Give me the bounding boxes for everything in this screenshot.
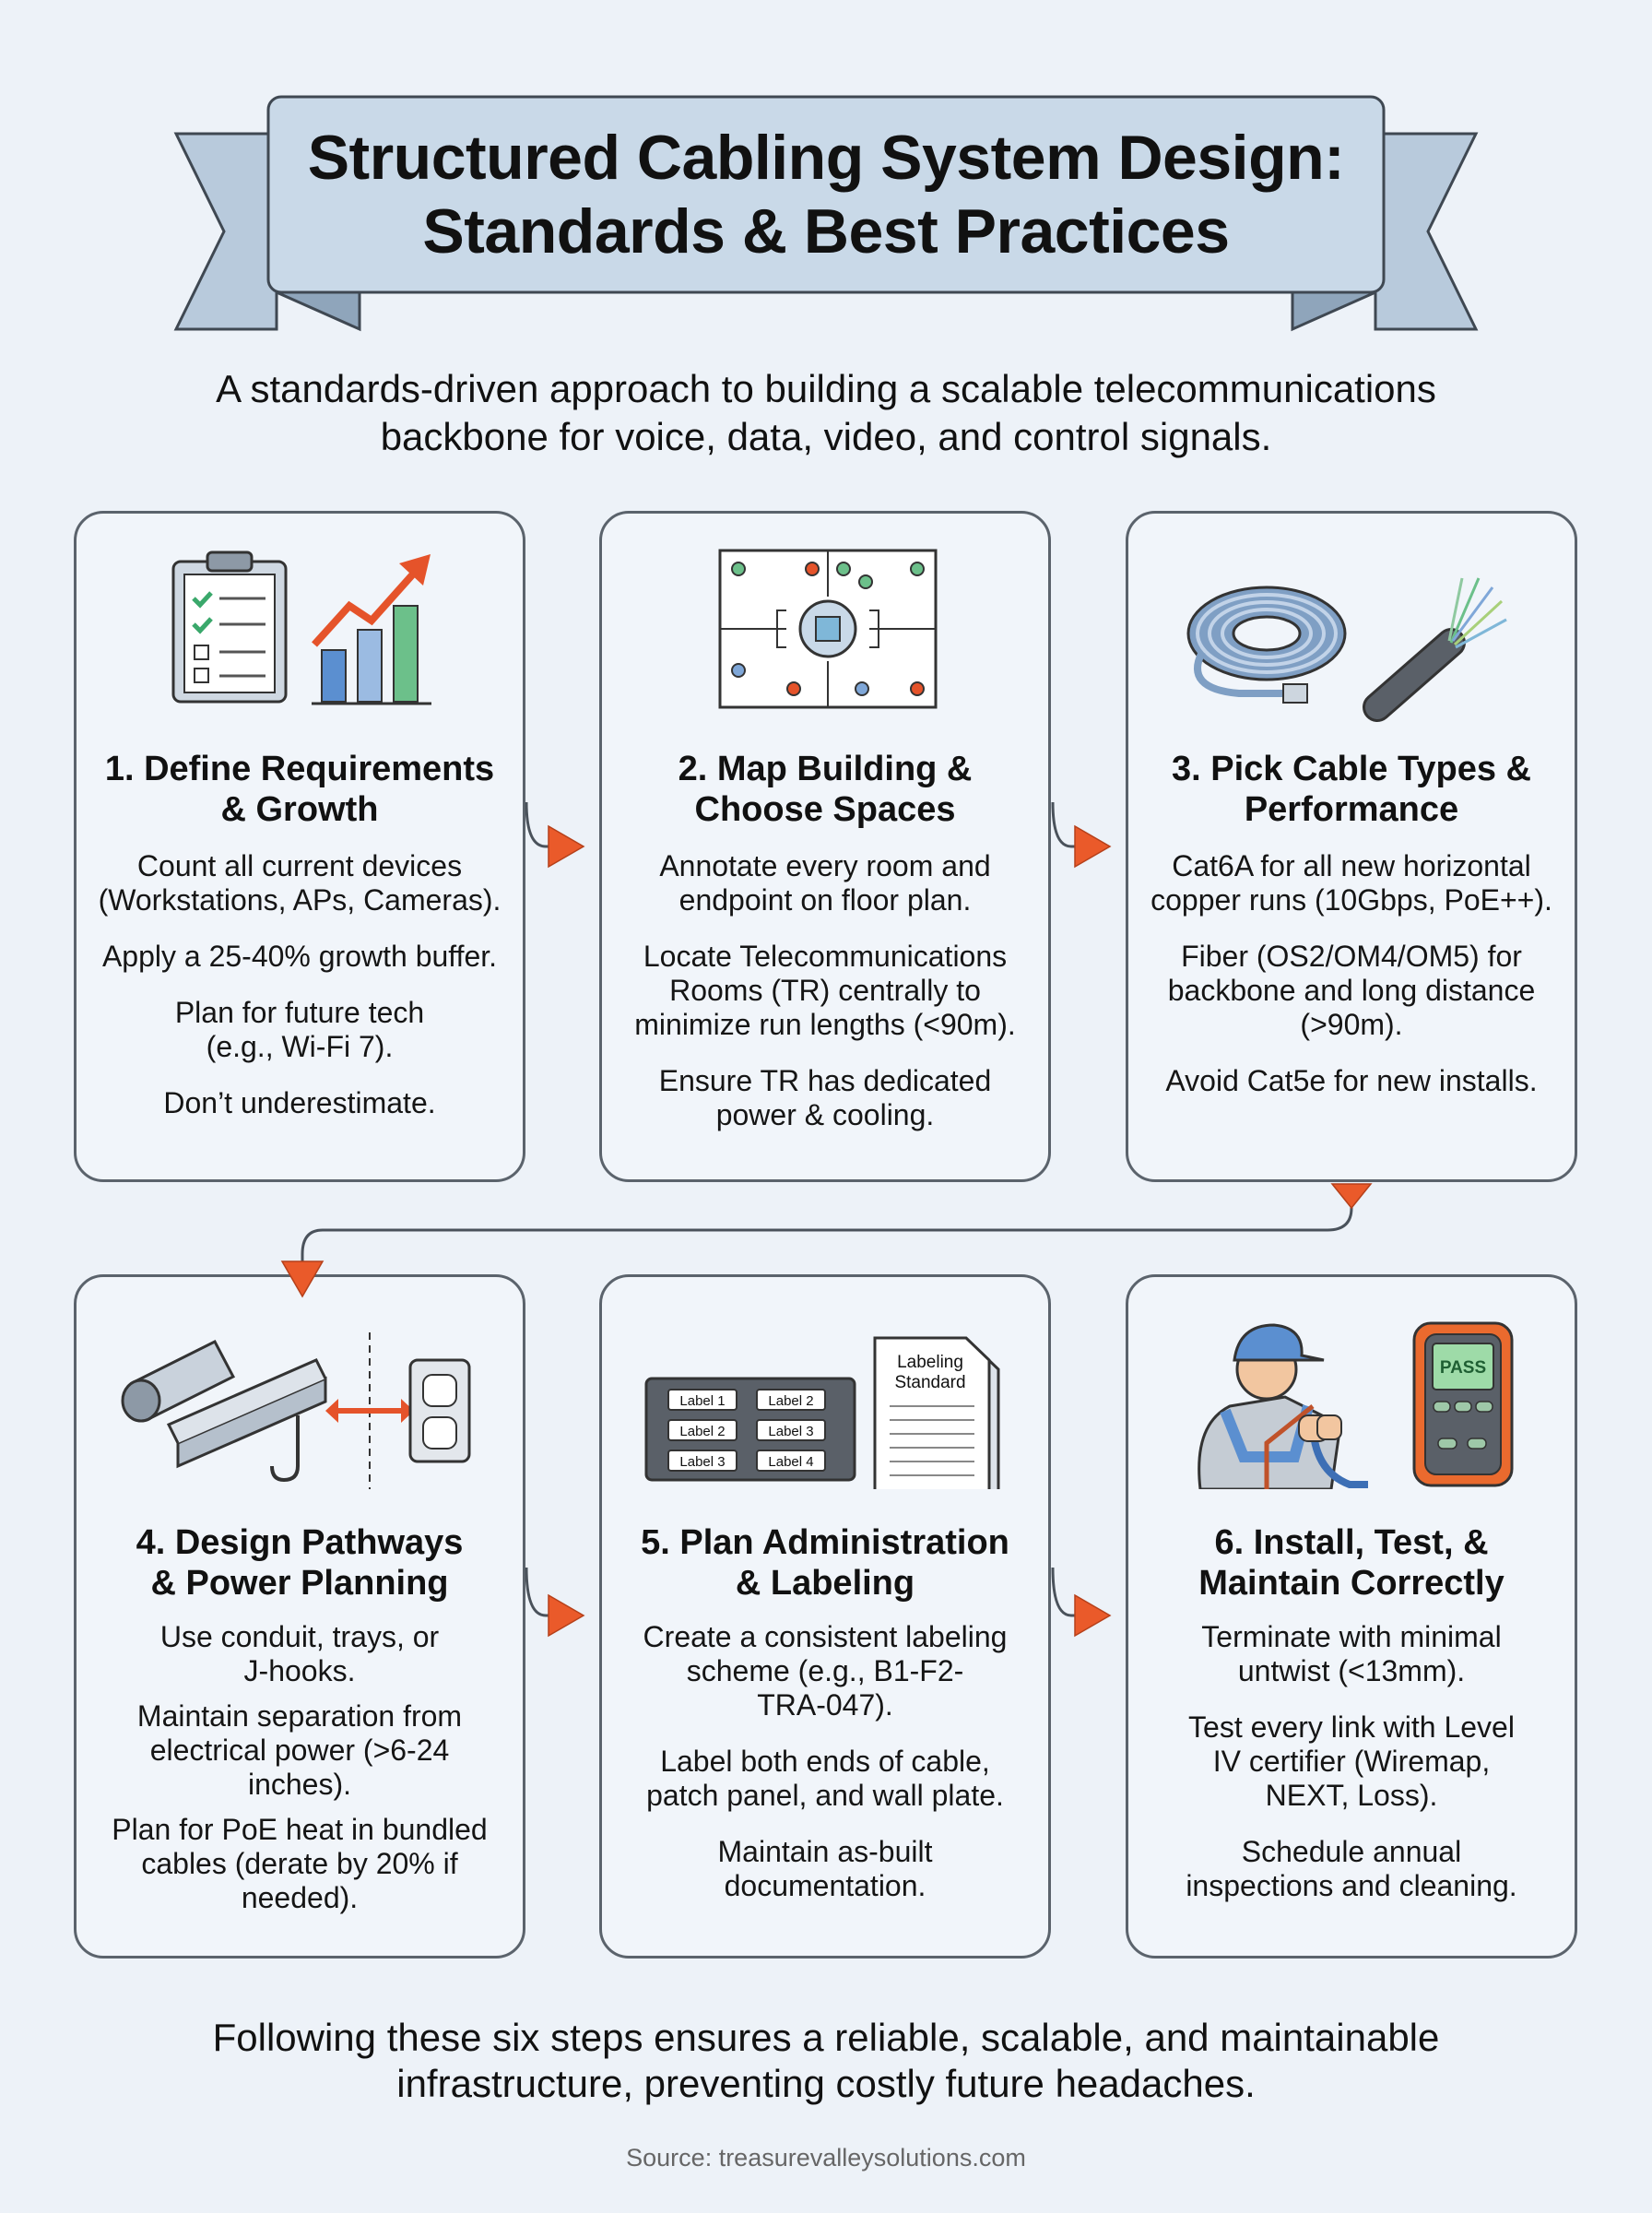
body 3: (>90m). [1300, 1008, 1403, 1041]
icon: patch panel and document: Label 1 [679, 1393, 726, 1409]
subtitle [216, 367, 1436, 458]
body 1: Apply a 25-40% growth buffer. [102, 940, 497, 973]
panel: 6 install test [1126, 1274, 1577, 1959]
icon: clipboard and growth chart [171, 551, 431, 704]
body 2: Rooms (TR) centrally to [669, 974, 981, 1007]
body 2: Locate Telecommunications [643, 940, 1007, 973]
body 4: inches). [248, 1768, 351, 1801]
body 5: documentation. [725, 1869, 926, 1902]
heading 2: Choose Spaces [695, 790, 955, 829]
body 5: Create a consistent labeling [643, 1620, 1007, 1653]
body 5: Label both ends of cable, [660, 1745, 990, 1778]
heading 1: 1. Define Requirements [105, 750, 494, 788]
heading 1 [105, 750, 494, 829]
body 6: untwist (<13mm). [1238, 1654, 1465, 1687]
icon: patch panel and document: Label 2 [679, 1424, 726, 1439]
body 4: cables (derate by 20% if [141, 1847, 458, 1880]
panel: 3 cable types [1126, 511, 1577, 1182]
heading 4: 4. Design Pathways [136, 1523, 463, 1562]
panel: 5 labeling [599, 1274, 1051, 1959]
banner ribbon [173, 96, 1479, 332]
body 1: Count all current devices [137, 849, 462, 882]
body 4: Plan for PoE heat in bundled [112, 1813, 488, 1846]
heading 5: & Labeling [736, 1564, 914, 1603]
heading 6: Maintain Correctly [1198, 1564, 1504, 1603]
heading 4 [136, 1523, 463, 1603]
icon: patch panel and document [645, 1337, 999, 1489]
icon: patch panel and document: Label 3 [679, 1454, 726, 1470]
title: Standards & Best Practices [422, 196, 1230, 266]
subtitle: backbone for voice, data, video, and control signals. [381, 415, 1271, 458]
body 1: (e.g., Wi-Fi 7). [206, 1030, 393, 1063]
panel: 4 pathways [74, 1274, 525, 1959]
body 1: (Workstations, APs, Cameras). [99, 883, 501, 917]
panel: 1 define requirements [74, 511, 525, 1182]
heading 5: 5. Plan Administration [641, 1523, 1009, 1562]
body 3: Cat6A for all new horizontal [1172, 849, 1531, 882]
body 6 [1186, 1620, 1517, 1902]
footer summary [213, 2016, 1439, 2105]
heading 3: 3. Pick Cable Types & [1172, 750, 1531, 788]
icon: patch panel and document: Standard [894, 1373, 966, 1392]
body 4: electrical power (>6-24 [150, 1734, 449, 1767]
body 4: J-hooks. [244, 1654, 355, 1687]
body 4 [112, 1620, 488, 1914]
body 2 [634, 849, 1016, 1131]
body 1: Plan for future tech [175, 996, 424, 1029]
icon: floor plan [719, 550, 937, 708]
body 2: power & cooling. [716, 1098, 934, 1131]
icon: patch panel and document: Labeling [897, 1353, 963, 1372]
heading 1: & Growth [221, 790, 378, 829]
body 5: patch panel, and wall plate. [646, 1779, 1004, 1812]
icon: technician and tester: PASS [1440, 1358, 1486, 1378]
heading 3: Performance [1245, 790, 1458, 829]
body 4: needed). [242, 1881, 358, 1914]
icon: cable coil and fiber [1187, 577, 1507, 722]
title [308, 123, 1344, 266]
body 1 [99, 849, 501, 1119]
body 5: scheme (e.g., B1-F2- [687, 1654, 963, 1687]
body 3: Avoid Cat5e for new installs. [1165, 1064, 1538, 1097]
body 6: Terminate with minimal [1201, 1620, 1502, 1653]
heading 2 [678, 750, 972, 829]
footer summary: infrastructure, preventing costly future headaches. [396, 2062, 1256, 2105]
icon: conduit tray and outlet [122, 1332, 470, 1489]
body 6: IV certifier (Wiremap, [1213, 1745, 1490, 1778]
body 6: NEXT, Loss). [1266, 1779, 1437, 1812]
icon: patch panel and document: Label 3 [768, 1424, 814, 1439]
heading 6 [1198, 1523, 1504, 1603]
heading 4: & Power Planning [150, 1564, 449, 1603]
heading 2: 2. Map Building & [678, 750, 972, 788]
body 4: Maintain separation from [137, 1699, 462, 1733]
icon: patch panel and document: Label 2 [768, 1393, 814, 1409]
body 5 [643, 1620, 1007, 1902]
body 3 [1150, 849, 1552, 1097]
heading 5 [641, 1523, 1009, 1603]
body 3: backbone and long distance [1168, 974, 1535, 1007]
body 4: Use conduit, trays, or [160, 1620, 439, 1653]
body 2: Annotate every room and [659, 849, 991, 882]
body 1: Don’t underestimate. [163, 1086, 436, 1119]
title: Structured Cabling System Design: [308, 123, 1344, 193]
body 3: Fiber (OS2/OM4/OM5) for [1181, 940, 1522, 973]
source: Source: treasurevalleysolutions.com [626, 2144, 1026, 2172]
icon: technician and tester [1198, 1322, 1514, 1489]
body 3: copper runs (10Gbps, PoE++). [1150, 883, 1552, 917]
body 5: TRA-047). [757, 1688, 893, 1722]
body 2: endpoint on floor plan. [679, 883, 971, 917]
heading 3 [1172, 750, 1531, 829]
body 2: Ensure TR has dedicated [659, 1064, 991, 1097]
body 5: Maintain as-built [717, 1835, 933, 1868]
subtitle: A standards-driven approach to building a scalable telecommunications [216, 367, 1436, 410]
body 6: inspections and cleaning. [1186, 1869, 1517, 1902]
icon: patch panel and document: Label 4 [768, 1454, 814, 1470]
footer summary: Following these six steps ensures a reliable, scalable, and maintainable [213, 2016, 1439, 2059]
body 6: Test every link with Level [1188, 1710, 1515, 1744]
body 6: Schedule annual [1242, 1835, 1461, 1868]
heading 6: 6. Install, Test, & [1214, 1523, 1489, 1562]
panel: 2 map building [599, 511, 1051, 1182]
body 2: minimize run lengths (<90m). [634, 1008, 1016, 1041]
